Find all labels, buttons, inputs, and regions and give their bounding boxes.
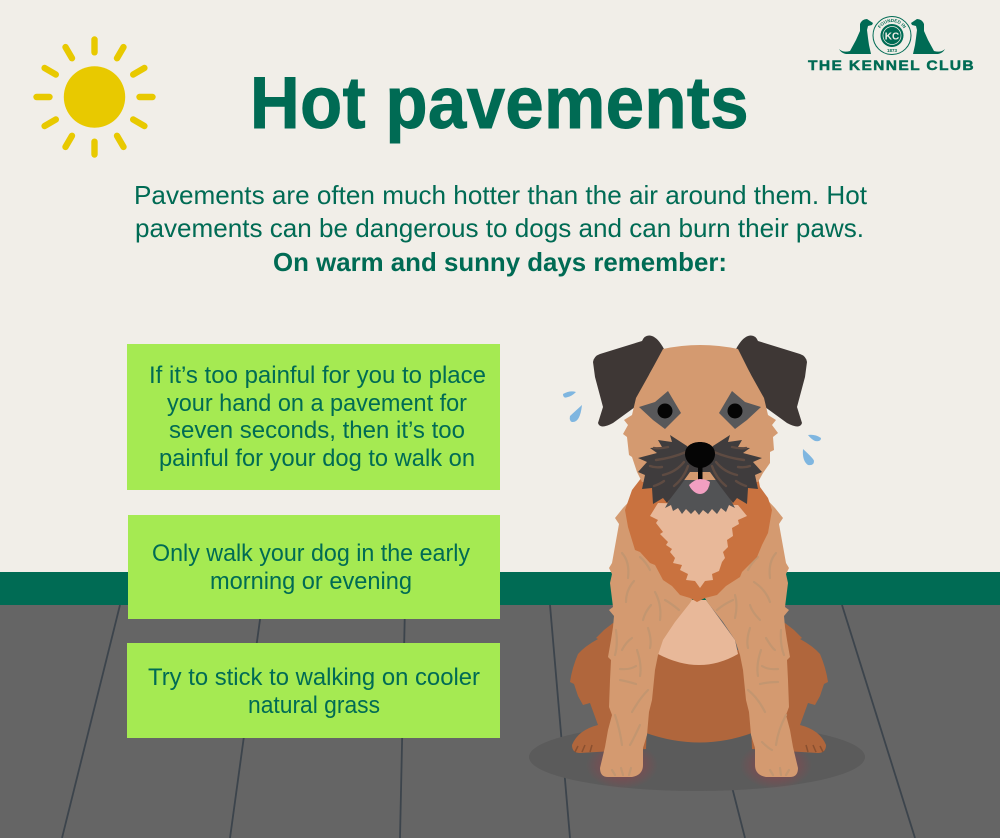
- dog orange chest: [625, 477, 772, 602]
- intro text: Pavements are often much hotter than the air around them. Hot: [134, 180, 868, 210]
- hot paw glow right: [740, 741, 812, 789]
- dog haunches and back feet: [570, 623, 828, 753]
- logo roundel: [872, 16, 912, 55]
- tip box: grass: natural grass: [248, 692, 380, 719]
- dog ear right: [736, 336, 807, 426]
- intro text: [134, 180, 868, 277]
- tip box: seven seconds: seven seconds, then it’s too: [169, 417, 465, 444]
- dog mouth line: [698, 465, 702, 480]
- logo roundel: FOUNDED IN: [878, 18, 906, 28]
- dog eye right: [719, 391, 761, 429]
- logo dog right: [911, 19, 945, 54]
- title: Hot pavements: [250, 63, 749, 144]
- dog lower chest: [658, 600, 738, 665]
- dog head: [623, 345, 778, 482]
- tip box: early morning: morning or evening: [210, 568, 412, 595]
- fur strokes on legs: [612, 553, 789, 775]
- tip box: seven seconds: [127, 344, 500, 490]
- skirting band: [0, 572, 1000, 605]
- tip box: grass: [127, 643, 500, 738]
- moustache fur strokes: [650, 447, 750, 486]
- logo dog left: [839, 19, 873, 54]
- pavement floor: [0, 605, 1000, 838]
- dog grey beard: [665, 480, 735, 515]
- dog moustache: [638, 435, 762, 504]
- tip box: early morning: [128, 515, 500, 619]
- sweat drops left: [563, 391, 582, 422]
- dog illustration: [563, 336, 828, 777]
- tip box: seven seconds: painful for your dog to walk on: [159, 445, 475, 472]
- sweat drops right: [803, 435, 821, 465]
- dog shadow: [529, 723, 865, 791]
- dog eye left: [639, 391, 681, 429]
- toe marks on back feet: [575, 745, 823, 752]
- hot paw glow left: [586, 741, 658, 789]
- dog pale bib: [650, 503, 747, 588]
- tip box: early morning: Only walk your dog in the early: [152, 540, 470, 567]
- intro text: pavements can be dangerous to dogs and can burn their paws.: [135, 213, 864, 243]
- tip box: seven seconds: If it’s too painful for you to place: [149, 362, 486, 389]
- logo: The Kennel Club: [808, 16, 975, 73]
- dog tongue: [689, 479, 710, 494]
- dog ear left: [593, 336, 664, 426]
- tip box: grass: Try to stick to walking on cooler: [148, 664, 480, 691]
- logo roundel: 1873: [887, 48, 898, 53]
- icon: sun: [36, 40, 152, 154]
- dog nose: [685, 442, 715, 468]
- logo wordmark: THE KENNEL CLUB: [808, 57, 975, 73]
- dog belly: [646, 650, 752, 742]
- tip box: seven seconds: your hand on a pavement for: [167, 390, 467, 417]
- intro emphasis: On warm and sunny days remember:: [273, 247, 727, 277]
- dog front legs: [600, 490, 798, 777]
- logo roundel: KC: [885, 32, 899, 42]
